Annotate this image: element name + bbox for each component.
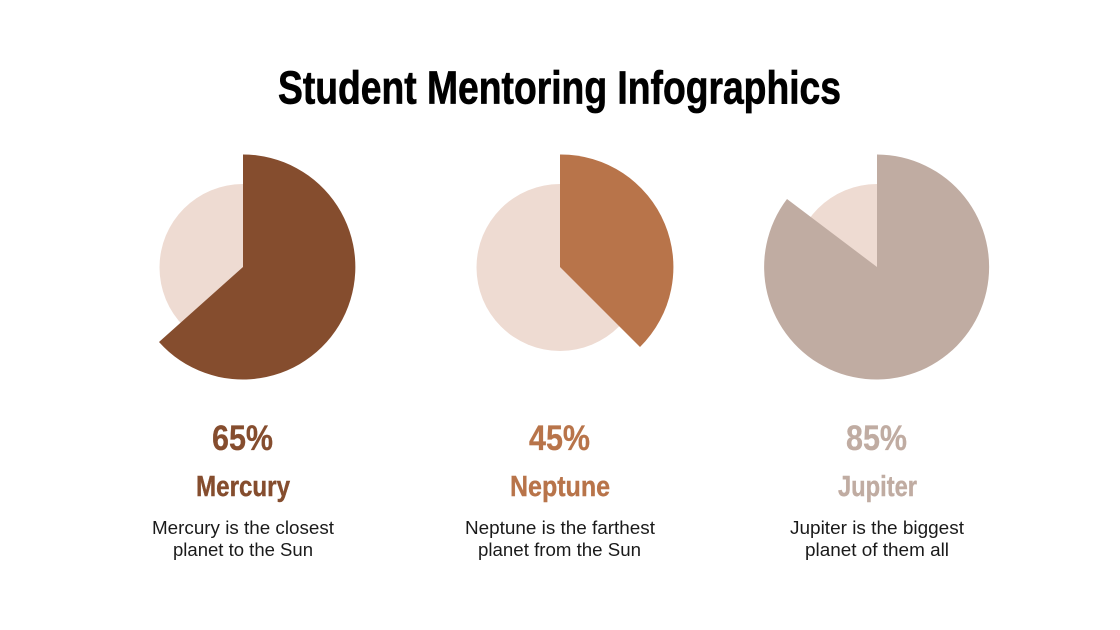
title: Student Mentoring Infographics bbox=[278, 62, 841, 114]
panel: Jupiter bbox=[764, 154, 989, 560]
description: Jupiter bbox=[790, 517, 964, 560]
heading: Mercury: Mercury bbox=[196, 471, 290, 503]
pie chart: Neptune 45% bbox=[476, 154, 673, 351]
pie chart: Mercury 65% bbox=[159, 154, 355, 379]
heading: Neptune: Neptune bbox=[510, 471, 610, 503]
description: Mercury: Mercury is the closest bbox=[152, 517, 334, 538]
percentage: 45%: 45% bbox=[529, 419, 590, 458]
percentage: 85%: 85% bbox=[846, 419, 907, 458]
heading: Jupiter: Jupiter bbox=[838, 471, 917, 503]
description: Mercury bbox=[152, 517, 334, 560]
description: Neptune bbox=[465, 517, 655, 560]
panel: Neptune bbox=[465, 154, 673, 560]
description: Neptune: Neptune is the farthest bbox=[465, 517, 655, 538]
percentage: 65%: 65% bbox=[212, 419, 273, 458]
description: Jupiter: Jupiter is the biggest bbox=[790, 517, 964, 538]
panel: Mercury bbox=[152, 154, 355, 560]
pie chart: Jupiter 85% bbox=[764, 154, 989, 379]
description: Mercury: planet to the Sun bbox=[173, 539, 313, 560]
description: Neptune: planet from the Sun bbox=[478, 539, 641, 560]
description: Jupiter: planet of them all bbox=[805, 539, 949, 560]
